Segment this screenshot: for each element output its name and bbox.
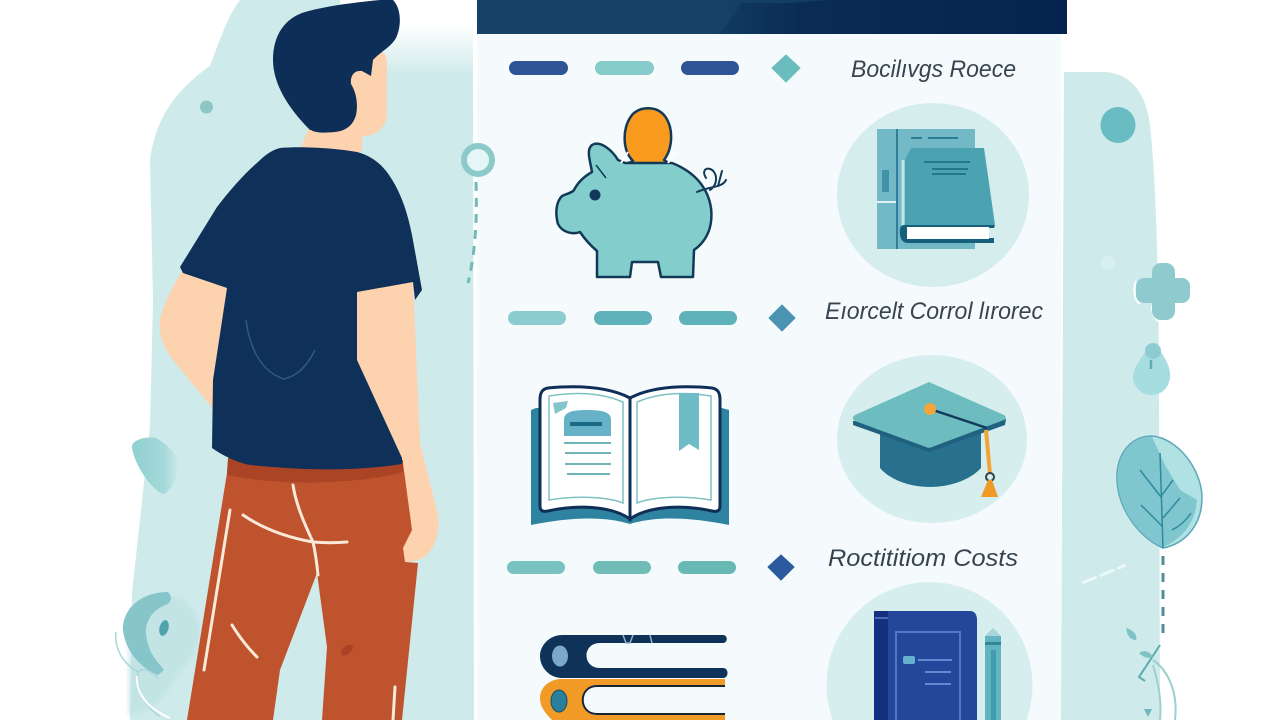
decoration: teal dot right: [1100, 107, 1136, 143]
decoration: faint ring right: [1101, 256, 1115, 270]
book pages: [900, 225, 995, 243]
background shape: right: [1061, 72, 1160, 720]
t-shirt creases: [246, 320, 315, 379]
row 1 heading: Bocilıvgs Roece: [851, 56, 1016, 83]
pencil: [985, 636, 1001, 720]
cap base: [880, 430, 981, 487]
icon: stacked books: [540, 635, 728, 720]
row 3 diamond: [768, 555, 794, 580]
decoration: small dot: [200, 100, 213, 114]
row 2 status bars: [508, 311, 737, 325]
trouser seams: [204, 485, 395, 720]
icon: open book: [531, 387, 729, 525]
decoration: left teardrop: [132, 437, 179, 494]
left page: [540, 387, 630, 519]
background shape: left: [130, 0, 474, 720]
circle backdrop: [826, 582, 1032, 720]
row 1 status bars: [509, 61, 739, 75]
cover: [531, 408, 729, 525]
back book: [877, 129, 975, 249]
neck and face: [300, 50, 387, 156]
right arm: [350, 280, 439, 562]
decoration: faint dash right: [1082, 565, 1126, 583]
bookmark: [679, 393, 699, 451]
circle backdrop: [837, 103, 1029, 287]
hair: [273, 0, 400, 133]
icon: book in circle: [837, 103, 1029, 287]
notebook: [874, 611, 977, 720]
decoration: plus shape: [1134, 263, 1190, 321]
t-shirt: [180, 147, 422, 469]
trouser spot: [339, 642, 355, 658]
decoration: ring with dashed line: [464, 146, 492, 283]
icon: piggy bank with coin: [556, 108, 726, 277]
row 2 heading: Eıorcelt Corrol lırorec: [825, 298, 1043, 325]
decoration: leaf: [1117, 436, 1202, 548]
row 1 diamond: [772, 55, 800, 82]
decoration: left swirl: [116, 592, 199, 718]
orange book: [540, 679, 725, 720]
trousers: [187, 460, 418, 720]
left arm: [160, 270, 230, 410]
panel: checklist sheet: [477, 30, 1061, 720]
waistband: [227, 458, 403, 482]
decoration: sprig: [1126, 628, 1176, 720]
front book: [905, 148, 995, 225]
icon: graduation cap in circle: [837, 355, 1027, 523]
decoration: droplet: [1133, 343, 1170, 395]
row 3 status bars: [507, 561, 736, 574]
circle backdrop: [837, 355, 1027, 523]
decoration: dashed stem: [1162, 556, 1164, 637]
cap board: [853, 419, 1006, 452]
row 3 heading: Roctititiom Costs: [828, 545, 1018, 572]
page inner lines: [549, 394, 711, 503]
right page: [630, 387, 720, 519]
tassel: [930, 409, 987, 428]
icon: notebook and pencil in circle: [826, 582, 1032, 720]
row 2 diamond: [769, 305, 795, 331]
navy book: [540, 635, 728, 678]
person: [160, 0, 439, 720]
header bar: [477, 0, 1067, 34]
